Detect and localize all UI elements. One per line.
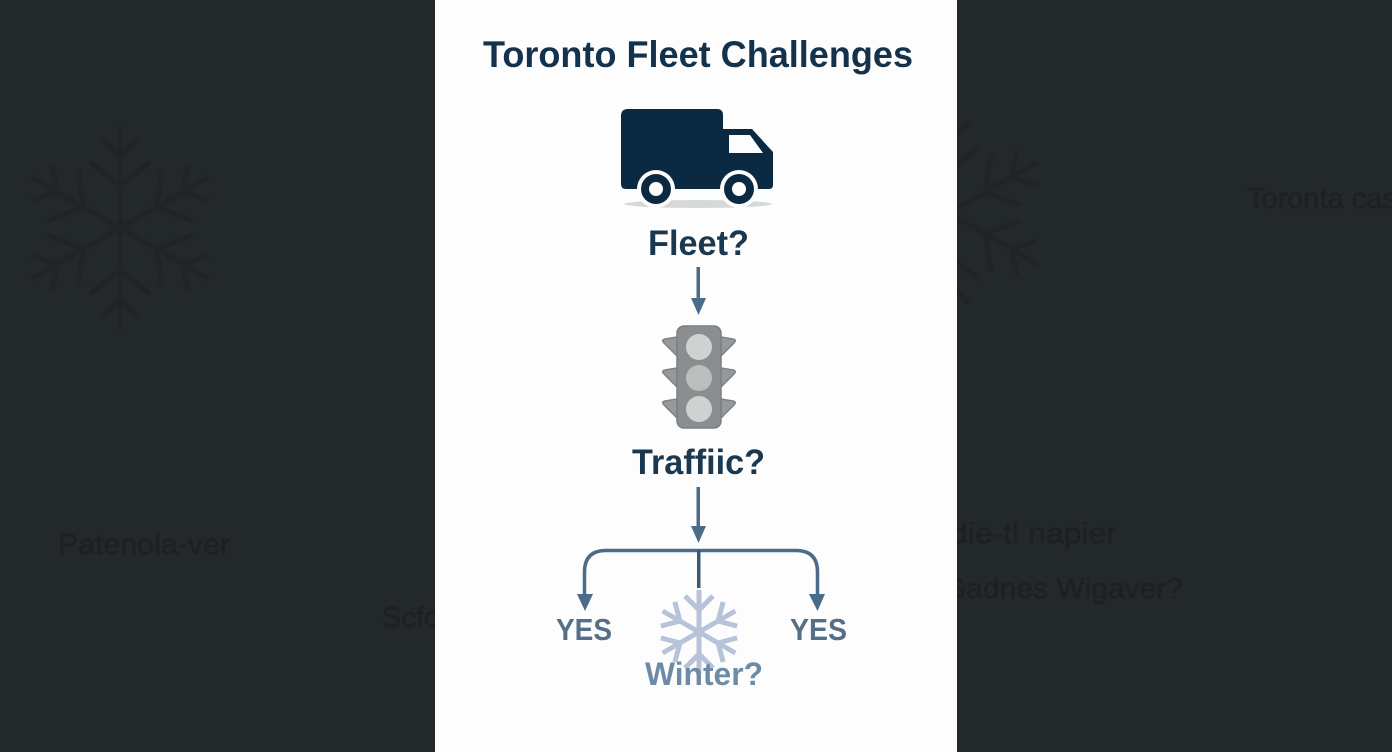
faint background snowflake right (845, 110, 1053, 316)
icon: snowflake (656, 590, 742, 674)
icon: traffic light (663, 326, 735, 428)
faint background snowflake left (16, 125, 224, 331)
branching arrows (577, 550, 825, 611)
arrow: traffic to branch (691, 487, 706, 543)
arrow: fleet to traffic (691, 267, 706, 315)
label: Fleet?: Fleet? (648, 224, 749, 263)
label: Traffiic?: Traffiic? (632, 443, 765, 482)
title: Toronto Fleet Challenges (483, 34, 913, 75)
faint background text lower right: Gadnes Wigaver? (943, 573, 1183, 605)
white central panel (435, 0, 957, 752)
label: Winter?: Winter? (645, 656, 763, 692)
faint background text lower left: Scfo (382, 602, 440, 634)
icon: delivery truck (621, 109, 773, 208)
faint background text left: Patenola-ver (58, 529, 230, 561)
label: right YES: YES (790, 612, 847, 647)
label: left YES: YES (556, 612, 612, 647)
faint background text middle right: die-tl napier (950, 518, 1117, 550)
